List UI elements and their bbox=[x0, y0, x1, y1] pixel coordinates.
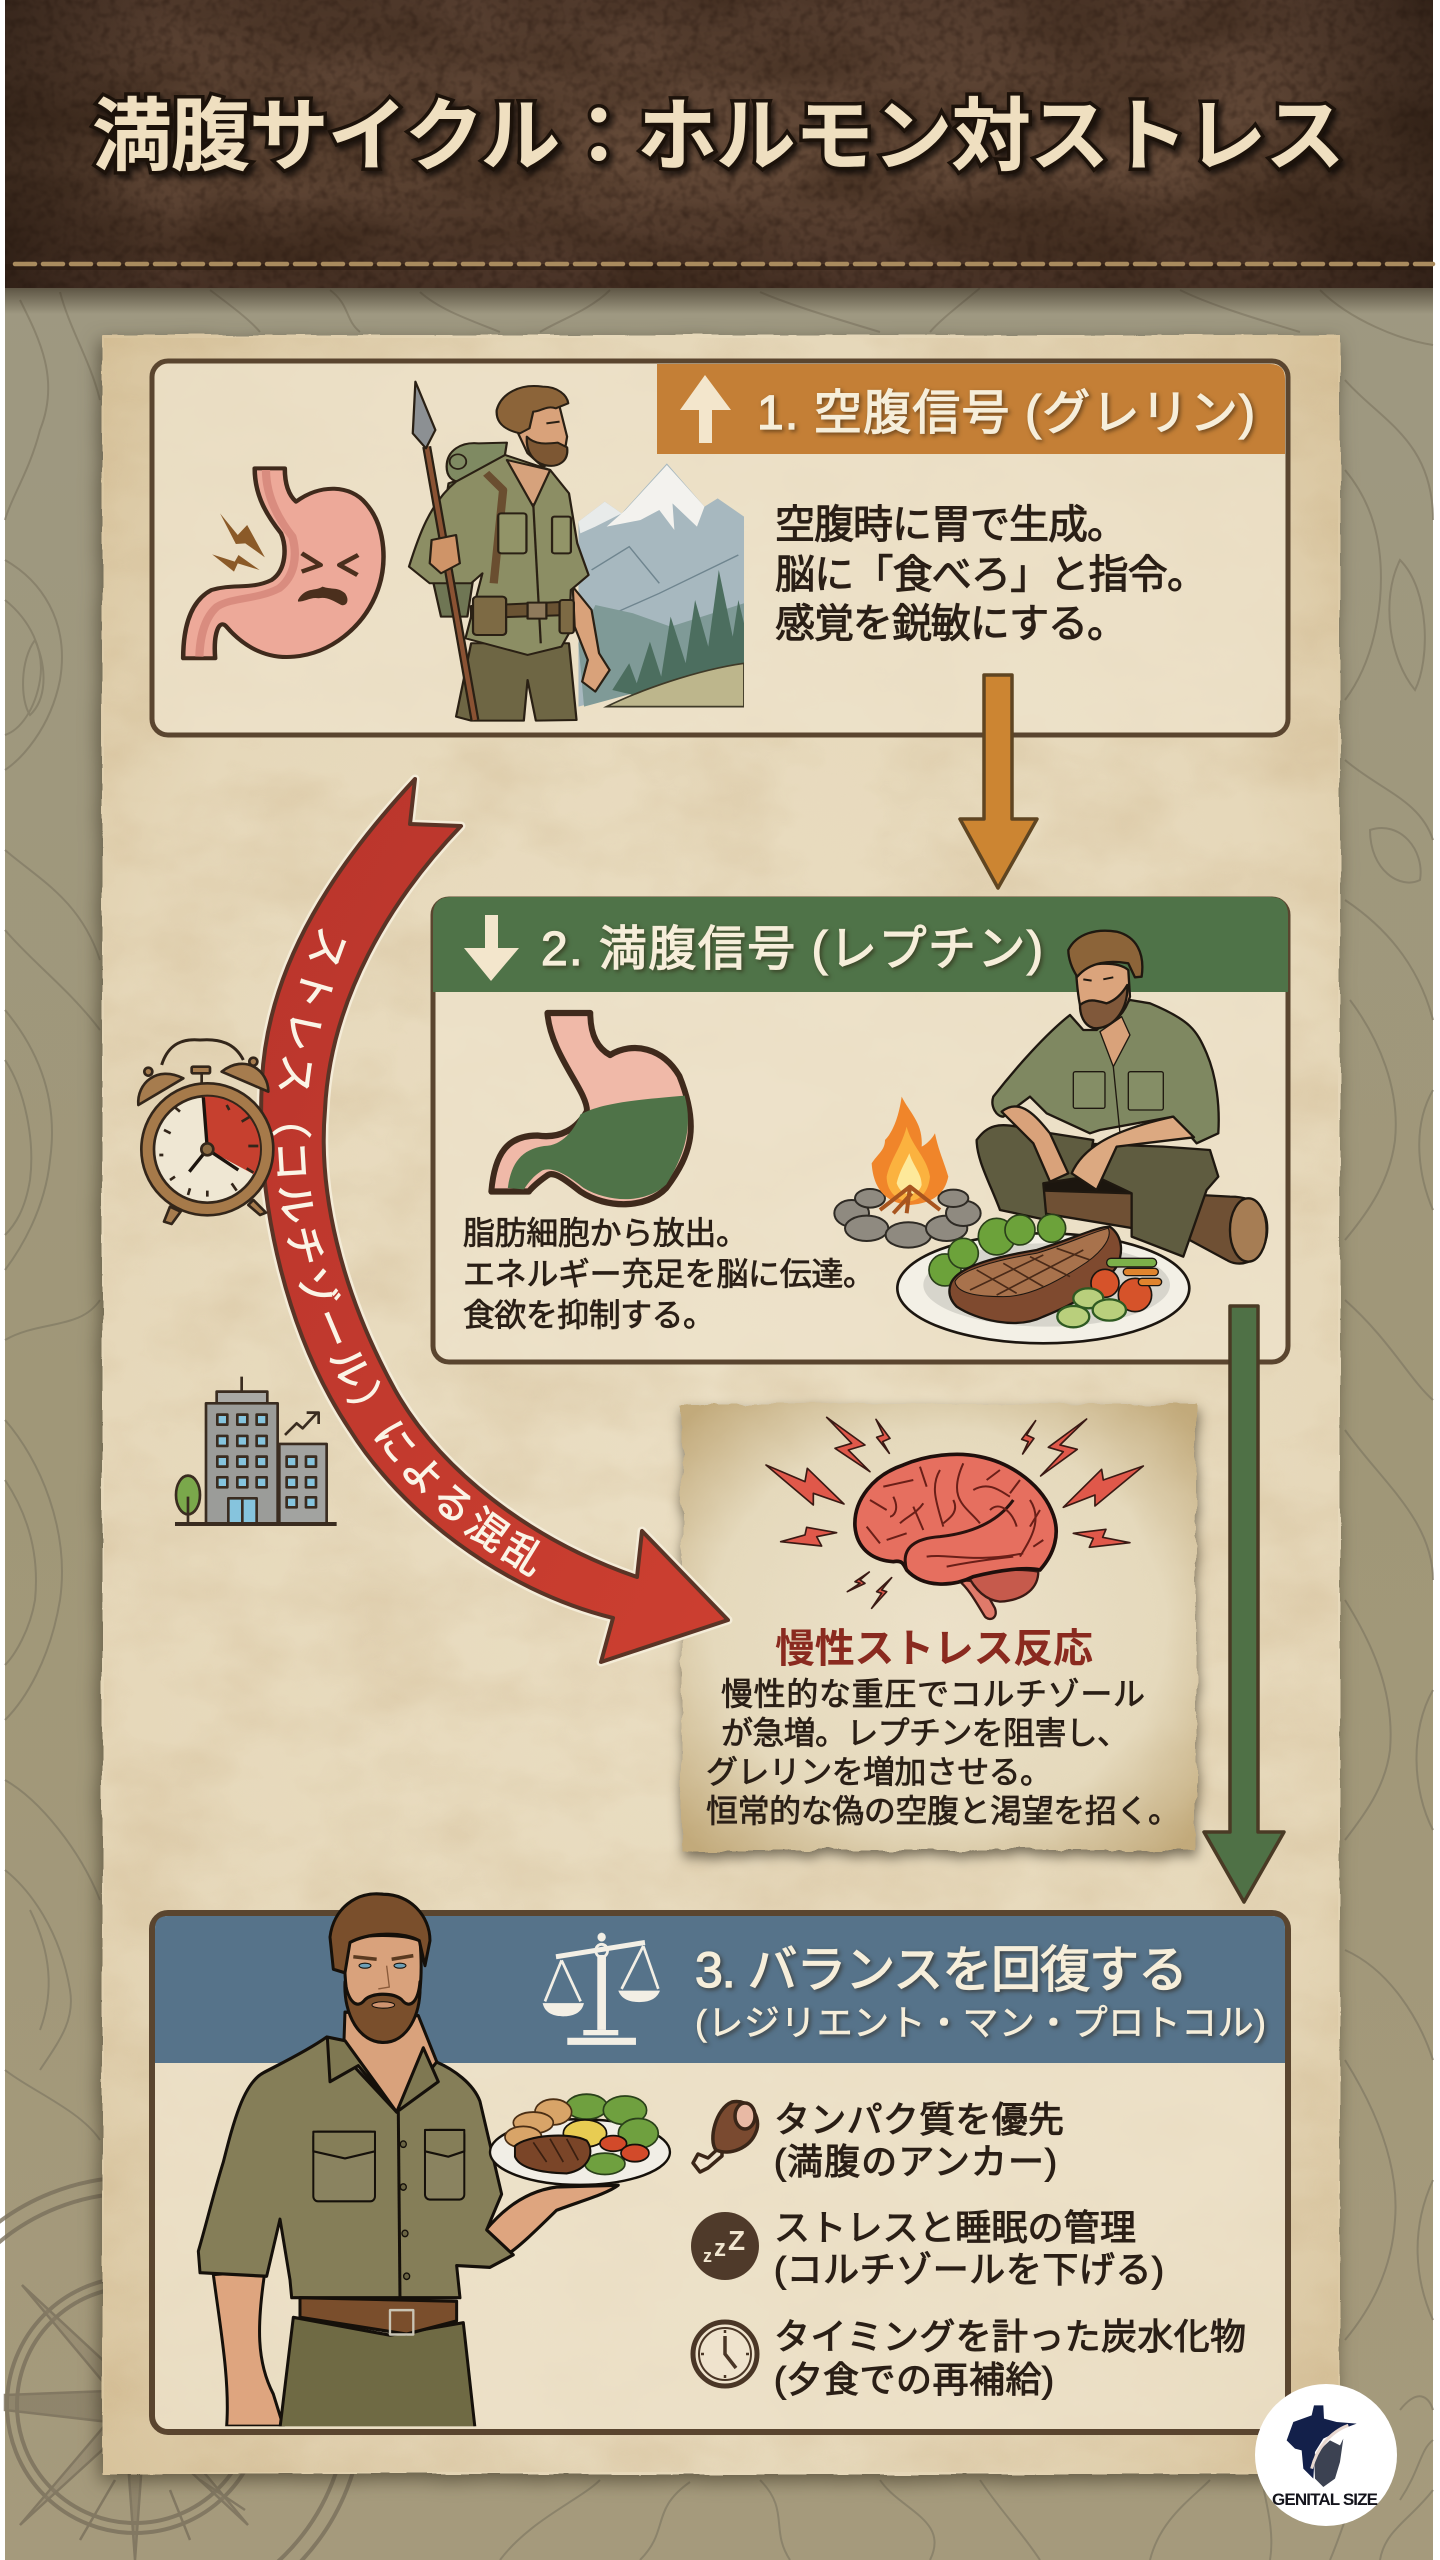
item 2 text: (コルチゾールを下げる) bbox=[774, 2249, 1164, 2290]
campfire bbox=[834, 1097, 981, 1248]
log bbox=[1043, 1187, 1267, 1264]
shirt bbox=[992, 1000, 1219, 1143]
panel 1 body text: 脳に「食べろ」と指令。 bbox=[775, 553, 1207, 597]
steak plate bbox=[897, 1214, 1189, 1343]
panel 2: fullness signal bbox=[433, 897, 1288, 1362]
panel 3: restoring balance bbox=[152, 1894, 1288, 2432]
belt and pouches bbox=[471, 602, 569, 618]
icon: full stomach bbox=[491, 1013, 691, 1204]
shirt bbox=[409, 455, 589, 655]
spear bbox=[427, 447, 475, 720]
bare forearm bbox=[573, 587, 610, 692]
item 3 text bbox=[774, 2316, 1246, 2400]
hiker with spear bbox=[409, 382, 610, 721]
icon: balance scale bbox=[543, 1933, 660, 2045]
panel 2 heading: 2. 満腹信号 (レプチン) bbox=[541, 923, 1043, 976]
title: 満腹サイクル：ホルモン対ストレス bbox=[92, 92, 1345, 181]
icon: sleep ZZZ: z bbox=[714, 2235, 726, 2262]
seated man on log bbox=[977, 931, 1267, 1264]
leather title banner bbox=[5, 0, 1433, 314]
mountain scene bbox=[578, 463, 744, 707]
up arrow icon bbox=[680, 375, 731, 443]
stitching bbox=[5, 264, 1433, 270]
panel 1 header bbox=[657, 364, 1285, 454]
plate bbox=[490, 2119, 670, 2185]
red arrow label: ストレス（コルチゾール）による混乱 bbox=[272, 928, 540, 1577]
orange arrow: panel 1 to panel 2 bbox=[960, 675, 1037, 888]
belt bbox=[300, 2298, 457, 2334]
panel 1 body text: 空腹時に胃で生成。 bbox=[775, 503, 1127, 547]
shadow under hands bbox=[1043, 1150, 1132, 1193]
panel 3 header bbox=[155, 1916, 1285, 2063]
right leg bbox=[1093, 1144, 1218, 1257]
forearms bbox=[1002, 1106, 1068, 1182]
neck bbox=[344, 2012, 438, 2116]
item 2 text bbox=[774, 2207, 1164, 2290]
icon: wall clock bbox=[693, 2322, 757, 2386]
panel 1: hunger signal bbox=[152, 361, 1288, 735]
head bbox=[1076, 964, 1130, 1027]
panel 1 body text bbox=[775, 503, 1207, 646]
icon: alarm clock bbox=[138, 1040, 273, 1224]
backpack bbox=[433, 470, 490, 617]
panel 2 body text: 食欲を抑制する。 bbox=[463, 1297, 715, 1333]
item 1 text: (満腹のアンカー) bbox=[774, 2141, 1057, 2182]
left leg bbox=[977, 1125, 1093, 1220]
green arrow: panel 2 to panel 3 bbox=[1204, 1306, 1284, 1902]
panel 2 header bbox=[433, 897, 1288, 992]
man holding plate bbox=[198, 1894, 670, 2428]
panel 1 heading: 1. 空腹信号 (グレリン) bbox=[757, 387, 1255, 440]
icon: stressed brain bbox=[766, 1417, 1143, 1619]
card body text: グレリンを増加させる。 bbox=[706, 1754, 1052, 1790]
checklist bbox=[691, 2099, 1246, 2400]
parchment sheet bbox=[102, 333, 1344, 2476]
trousers bbox=[456, 643, 577, 721]
card body text: が急増。レプチンを阻害し、 bbox=[721, 1715, 1129, 1751]
panel 1 body text: 感覚を鋭敏にする。 bbox=[775, 602, 1127, 646]
card body text: 恒常的な偽の空腹と渇望を招く。 bbox=[706, 1793, 1180, 1829]
shirt bbox=[198, 2037, 513, 2298]
card heading: 慢性ストレス反応 bbox=[775, 1627, 1093, 1671]
logo badge bbox=[1255, 2384, 1397, 2526]
icon: meat drumstick bbox=[693, 2101, 758, 2172]
panel 2 body text bbox=[463, 1215, 875, 1333]
logo figure bbox=[1287, 2405, 1357, 2487]
icon: office building bbox=[175, 1377, 337, 1524]
logo wordmark: GENITAL SIZE bbox=[1272, 2490, 1378, 2509]
icon: sleep ZZZ bbox=[691, 2212, 759, 2280]
panel 3 subheading: (レジリエント・マン・プロトコル) bbox=[695, 2002, 1266, 2043]
trousers bbox=[280, 2317, 475, 2428]
item 2 text: ストレスと睡眠の管理 bbox=[774, 2207, 1136, 2248]
card body text bbox=[706, 1676, 1180, 1829]
panel 2 body text: 脂肪細胞から放出。 bbox=[463, 1215, 748, 1251]
icon: sleep ZZZ: Z bbox=[728, 2225, 745, 2256]
item 3 text: (夕食での再補給) bbox=[774, 2359, 1054, 2400]
hand on spear bbox=[430, 535, 460, 573]
head bbox=[344, 1936, 423, 2003]
forearm right bbox=[486, 2185, 618, 2255]
head bbox=[511, 400, 567, 467]
icon: sleep ZZZ: z bbox=[703, 2246, 712, 2266]
item 1 text: タンパク質を優先 bbox=[774, 2099, 1064, 2140]
panel 3 heading: 3. バランスを回復する bbox=[695, 1942, 1188, 1998]
compass rose bbox=[0, 2177, 363, 2560]
down arrow icon bbox=[464, 915, 519, 981]
item 3 text: タイミングを計った炭水化物 bbox=[774, 2316, 1246, 2357]
card body text: 慢性的な重圧でコルチゾール bbox=[721, 1676, 1145, 1712]
item 1 text bbox=[774, 2099, 1064, 2182]
panel 2 body text: エネルギー充足を脳に伝達。 bbox=[463, 1256, 875, 1292]
icon: hungry stomach bbox=[183, 468, 383, 658]
red stress arrow bbox=[256, 774, 732, 1666]
arm left bbox=[213, 2271, 283, 2426]
stress reaction card bbox=[682, 1404, 1196, 1850]
